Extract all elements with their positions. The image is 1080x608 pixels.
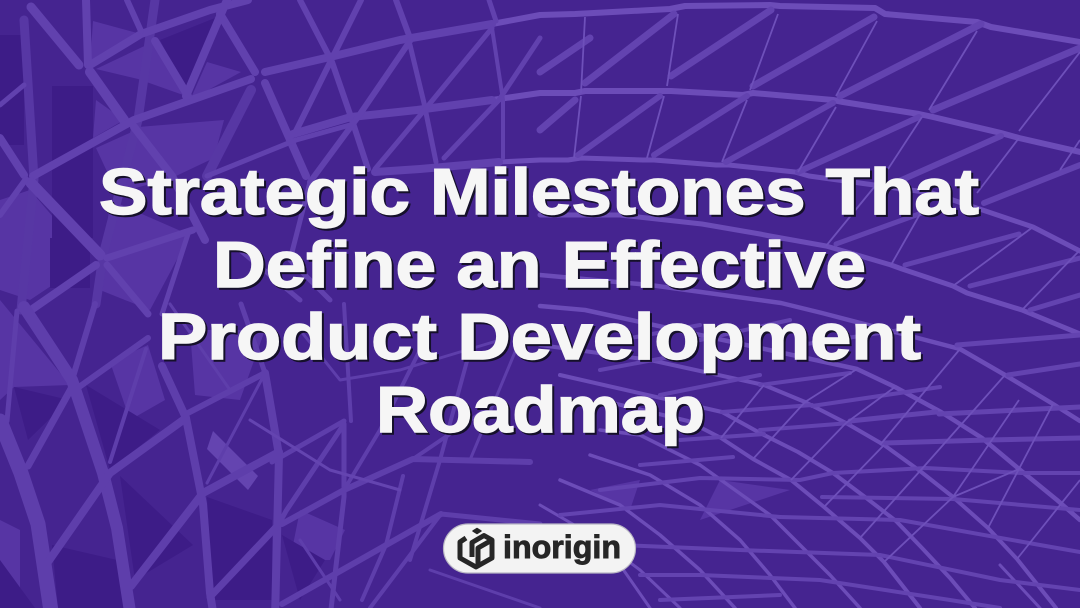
icon: inorigin hexagon mark (460, 528, 492, 567)
upper-left struts (0, 0, 540, 314)
title: Product Development (158, 300, 921, 373)
dome ribs: thick rising diagonals (540, 10, 1080, 608)
title: Define an Effective (213, 228, 866, 301)
title: Roadmap (376, 373, 705, 446)
logo wordmark: inorigin (503, 529, 621, 565)
dome ribs: thin rising lines (574, 14, 1080, 562)
logo badge (444, 524, 636, 573)
logo pill (444, 524, 636, 573)
lower-left struts (0, 304, 540, 608)
title: Strategic Milestones That (99, 155, 979, 228)
title (99, 155, 979, 446)
dome ribs: descending rows (492, 5, 1080, 608)
